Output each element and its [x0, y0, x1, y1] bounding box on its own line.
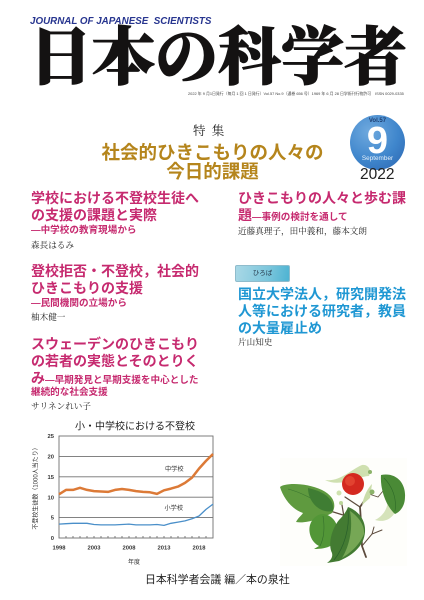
article 4 title: 題―事例の検討を通して [238, 207, 348, 223]
x axis labels: 2018 [193, 546, 206, 552]
badge circle [350, 115, 405, 170]
y axis labels: 5 [51, 516, 55, 522]
x axis labels: 2013 [158, 546, 171, 552]
hiroba author: 片山知史 [238, 337, 272, 347]
leaf: upper left [280, 484, 334, 522]
y axis labels: 25 [48, 434, 55, 440]
hiroba title [238, 286, 406, 336]
publication details line: 2022 年 9 月1日発行（毎月 1 回 1 日発行）Vol.57 No.9（通巻 656 号）1969 年 6 月 28 日学術刊行物許可 ISSN 0029-0335 [188, 90, 404, 96]
article 3 title: み―早期発見と早期支援を中心とした [31, 370, 198, 386]
hiroba title: の大量雇止め [238, 320, 322, 336]
elementary line [59, 504, 213, 525]
branches [327, 491, 383, 557]
article 4 [238, 190, 406, 236]
article 1 title [31, 190, 199, 223]
y axis title: 不登校生徒数（1000人当たり） [32, 444, 40, 530]
article 1 title: の支援の課題と実際 [31, 207, 157, 223]
hiroba badge [235, 265, 290, 282]
series label: junior high: 中学校 [165, 465, 184, 473]
y axis labels [48, 434, 55, 542]
article 1 subtitle: ―中学校の教育現場から [31, 225, 137, 236]
small buds [336, 490, 342, 496]
illustration: dogwood branch with red fruit [280, 464, 406, 563]
article 3 title: スウェーデンのひきこもり [31, 336, 199, 352]
article 3 title [31, 336, 199, 386]
article 3 title: の若者の実態とそのとりく [31, 353, 199, 369]
hiroba title: 国立大学法人，研究開発法 [238, 286, 406, 302]
plot frame and grid [59, 436, 213, 538]
article 2 [31, 263, 199, 322]
article 4 author: 近藤真理子，田中義和，藤本文朗 [238, 226, 367, 236]
article 1 [31, 190, 199, 250]
x axis labels: 1998 [53, 546, 66, 552]
year: 2022 [360, 166, 394, 183]
x axis labels: 2008 [123, 546, 136, 552]
article 4 title: ひきこもりの人々と歩む課 [238, 190, 406, 206]
article 1 author: 森長はるみ [31, 240, 74, 250]
volume: Vol.57 [369, 118, 386, 124]
article 2 title [31, 263, 199, 296]
masthead title: 日本の科学者 [29, 23, 407, 93]
hiroba title: 人等における研究者，教員 [238, 303, 406, 319]
pale leaves [325, 465, 370, 483]
article 2 title: 登校拒否・不登校，社会的 [31, 263, 199, 279]
article 3 subtitle: 継続的な社会支援 [31, 387, 108, 398]
y axis labels: 10 [48, 495, 54, 501]
hiroba badge: ひろば [253, 270, 272, 277]
chart title: 小・中学校における不登校 [75, 420, 195, 432]
x axis labels [53, 546, 206, 552]
leaf: upper right [381, 475, 405, 514]
x axis title: 年度 [128, 558, 140, 566]
y axis labels: 0 [51, 536, 54, 542]
issue badge [350, 115, 405, 183]
special feature heading [101, 142, 324, 182]
article 2 author: 柚木健一 [31, 312, 65, 322]
hiroba article [238, 286, 406, 347]
month: September [362, 155, 393, 162]
special feature label: 特 集 [193, 124, 224, 138]
leaf: large front [327, 507, 365, 563]
special feature heading: 今日的課題 [166, 160, 259, 182]
issue number: 9 [367, 120, 388, 162]
article 2 title: ひきこもりの支援 [31, 280, 143, 296]
special feature heading: 社会的ひきこもりの人々の [101, 142, 324, 163]
leaf: middle [309, 514, 338, 549]
article 1 title: 学校における不登校生徒へ [31, 190, 199, 206]
article 4 title [238, 190, 406, 223]
article 3 [31, 336, 199, 411]
journal English name: JOURNAL OF JAPANESE SCIENTISTS [30, 16, 211, 27]
publisher line: 日本科学者会議 編／本の泉社 [145, 574, 290, 586]
y axis labels: 20 [48, 454, 54, 460]
x axis labels: 2003 [88, 546, 101, 552]
series label: elementary: 小学校 [164, 504, 183, 512]
red fruit [342, 473, 364, 495]
article 2 subtitle: ―民間機関の立場から [31, 298, 127, 309]
junior high line [59, 454, 213, 494]
article 3 author: サリネンれい子 [31, 401, 91, 411]
y axis labels: 15 [48, 475, 55, 481]
